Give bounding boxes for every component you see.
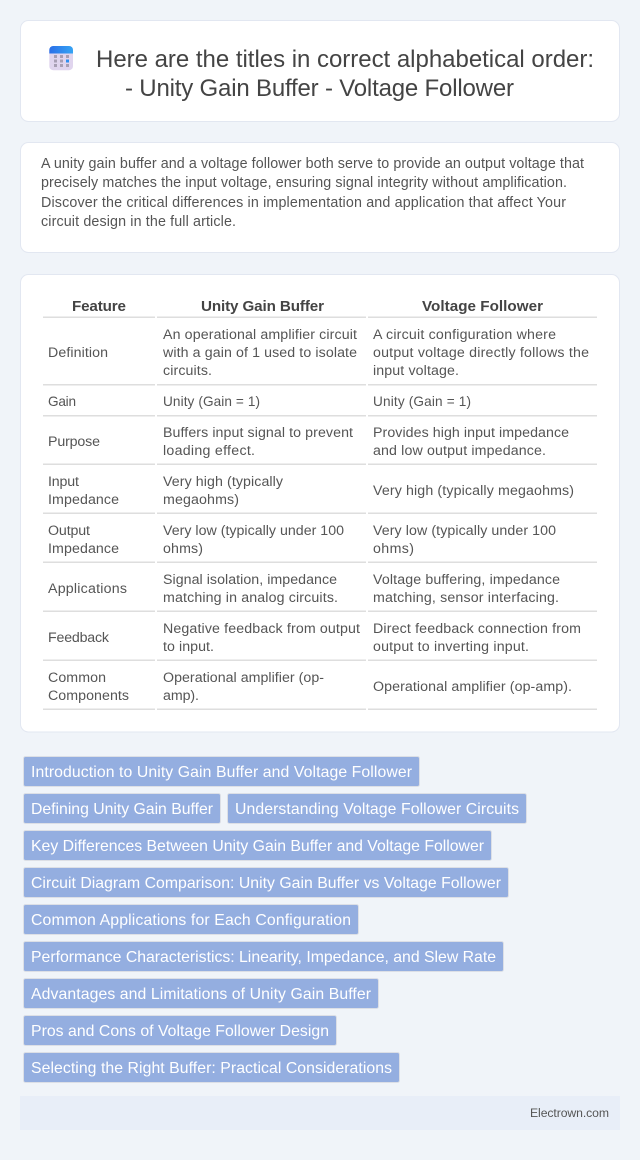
row: input impedance [43, 474, 597, 514]
row: common components: Operational amplifier (op-amp). [373, 679, 572, 695]
panel: comparison table [20, 274, 620, 732]
row: common components: Components [48, 688, 129, 704]
row: applications [43, 572, 597, 612]
row: applications: matching, sensor interfacing. [373, 590, 559, 606]
row: output impedance: ohms) [163, 541, 203, 557]
tag: understanding [228, 794, 526, 824]
table header row: Feature [72, 298, 126, 315]
row: input impedance: Input [48, 474, 79, 490]
row: definition: output voltage directly follows the [373, 345, 589, 361]
intro paragraph: A unity gain buffer and a voltage follower both serve to provide an output voltage that [41, 156, 584, 172]
row: input impedance: Very high (typically [163, 474, 284, 490]
row: gain [43, 394, 597, 416]
row: purpose: Provides high input impedance [373, 425, 569, 441]
row: common components: Common [48, 670, 106, 686]
tag: circuit diagram: Circuit Diagram Comparison: Unity Gain Buffer vs Voltage Follower [31, 875, 501, 892]
row: feedback: Feedback [48, 630, 110, 646]
row: definition: Definition [48, 345, 108, 361]
row: gain: Gain [48, 394, 76, 409]
tag: performance [24, 942, 504, 972]
title [96, 46, 594, 102]
row: output impedance: Impedance [48, 541, 119, 557]
intro paragraph: Discover the critical differences in implementation and application that affect Your [41, 195, 566, 211]
table header row: Unity Gain Buffer [201, 298, 324, 315]
row: definition: circuits. [163, 363, 212, 379]
row: definition: A circuit configuration where [373, 327, 556, 343]
row: purpose: Purpose [48, 434, 100, 450]
table header row: Voltage Follower [422, 298, 543, 315]
row: applications: Applications [48, 581, 127, 597]
tag: defining: Defining Unity Gain Buffer [31, 801, 213, 818]
row: purpose [43, 425, 597, 465]
intro paragraph: circuit design in the full article. [41, 214, 236, 230]
tag: advantages: Advantages and Limitations of Unity Gain Buffer [31, 986, 371, 1003]
tag: selecting: Selecting the Right Buffer: Practical Considerations [31, 1060, 392, 1077]
tag: understanding: Understanding Voltage Follower Circuits [235, 801, 519, 818]
row: applications: Voltage buffering, impedance [373, 572, 560, 588]
topic tags [24, 756, 526, 1082]
tag: performance: Performance Characteristics: Linearity, Impedance, and Slew Rate [31, 949, 496, 966]
row: purpose: Buffers input signal to prevent [163, 425, 353, 441]
row: feedback: Direct feedback connection from [373, 621, 581, 637]
row: input impedance: Impedance [48, 492, 119, 508]
row: feedback: output to inverting input. [373, 639, 529, 655]
tag: advantages [24, 978, 378, 1008]
row: feedback: Negative feedback from output [163, 621, 360, 637]
tag: introduction [24, 756, 420, 786]
icon: calendar [49, 46, 73, 70]
row: output impedance: ohms) [373, 541, 414, 557]
title: Here are the titles in correct alphabetical order: [96, 46, 594, 73]
row: definition [43, 327, 597, 386]
row: feedback: to input. [163, 639, 214, 655]
row: output impedance [43, 523, 597, 563]
title: - Unity Gain Buffer - Voltage Follower [125, 75, 514, 102]
row: definition: An operational amplifier circuit [163, 327, 357, 343]
footer bar [20, 1096, 620, 1130]
tag: pros and cons [24, 1016, 336, 1046]
row: output impedance: Very low (typically under 100 [163, 523, 344, 539]
row: output impedance: Very low (typically under 100 [373, 523, 556, 539]
row: definition: with a gain of 1 used to isolate [162, 345, 357, 361]
row: common components [43, 670, 597, 710]
tag: selecting [24, 1052, 400, 1082]
tag: common applications: Common Applications for Each Configuration [31, 912, 351, 929]
table header row [43, 298, 597, 318]
panel: intro text [20, 142, 620, 252]
intro paragraph: precisely matches the input voltage, ensuring signal integrity without amplification. [41, 175, 567, 191]
row: input impedance: megaohms) [163, 492, 239, 508]
row: common components: amp). [163, 688, 199, 704]
tag: common applications [24, 904, 358, 934]
footer credit: Electrown.com [530, 1106, 609, 1120]
tag: introduction: Introduction to Unity Gain Buffer and Voltage Follower [31, 764, 412, 781]
tag: defining [24, 794, 220, 824]
row: definition: input voltage. [373, 363, 459, 379]
row: common components: Operational amplifier (op- [163, 670, 324, 686]
row: purpose: loading effect. [163, 443, 255, 459]
row: feedback [43, 621, 597, 661]
tag: pros and cons: Pros and Cons of Voltage Follower Design [31, 1023, 329, 1040]
tag: key differences: Key Differences Between Unity Gain Buffer and Voltage Follower [31, 838, 484, 855]
row: input impedance: Very high (typically megaohms) [373, 483, 574, 499]
row: applications: Signal isolation, impedance [163, 572, 337, 588]
row: output impedance: Output [48, 523, 90, 539]
row: gain: Unity (Gain = 1) [373, 394, 471, 409]
row: purpose: and low output impedance. [373, 443, 546, 459]
tag: circuit diagram [24, 868, 508, 898]
row: applications: matching in analog circuits. [163, 590, 338, 606]
panel: title header [20, 20, 620, 122]
intro paragraph [41, 156, 584, 230]
row: gain: Unity (Gain = 1) [163, 394, 260, 409]
tag: key differences [24, 830, 492, 860]
